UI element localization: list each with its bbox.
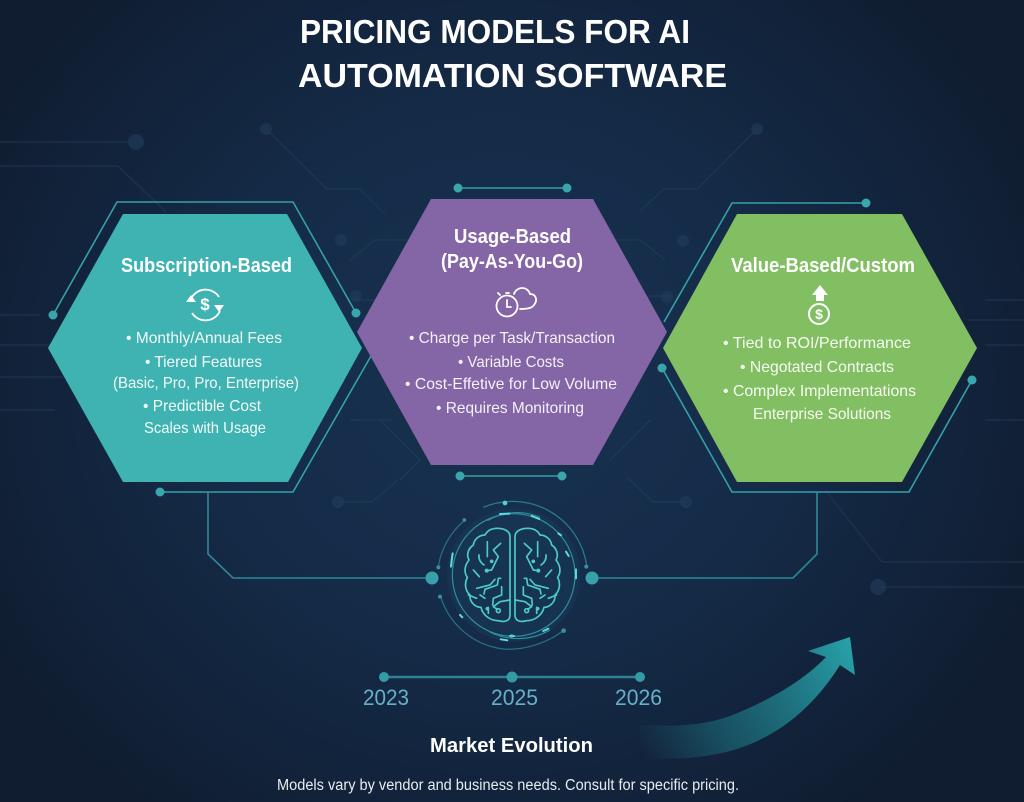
title: PRICING MODELS FOR AI [300,13,690,50]
text: usage features [405,330,617,417]
connector: subscription hexagon outline [48,202,371,496]
timeline: 2025 [491,685,538,710]
title [298,13,727,94]
heading: market evolution: Market Evolution [430,734,593,757]
icon: arrow over coin: $ [815,306,823,322]
connector: usage hexagon top bar [454,184,572,192]
connector: value hexagon outline [658,198,976,492]
footer note: Models vary by vendor and business needs. Consult for specific pricing. [277,777,739,794]
text: value features: • Tied to ROI/Performance [723,335,911,352]
circuit background pattern [0,129,1024,587]
text: usage features: • Cost-Effetive for Low Volume [405,376,617,393]
text: subscription features: • Predictible Cost [143,398,262,415]
timeline: 2026 [615,685,662,710]
connector: left hexagon to brain [208,492,438,584]
heading: usage-based [441,226,583,273]
heading: usage-based: Usage-Based [454,226,571,248]
text: value features: • Negotated Contracts [740,359,894,376]
panel: usage-based [357,199,667,465]
connector: usage hexagon bottom bar [456,472,566,480]
icon: recurring dollar [186,290,224,320]
text: usage features: • Charge per Task/Transaction [409,330,615,347]
text: subscription features: (Basic, Pro, Pro, Enterprise) [113,375,299,392]
icon: arrow over coin [809,285,829,324]
icon: circuit brain [436,501,588,649]
icon: stopwatch and cloud [496,288,536,316]
heading: subscription-based: Subscription-Based [121,255,292,277]
text: value features: Enterprise Solutions [753,406,891,423]
text: subscription features: • Tiered Features [145,354,262,371]
text: subscription features: • Monthly/Annual Fees [126,330,282,347]
icon: recurring dollar: $ [200,295,210,314]
arrow: market growth [640,637,855,759]
timeline [363,672,662,710]
timeline: 2023 [363,685,409,710]
panel: value-based/custom [663,214,977,482]
title: AUTOMATION SOFTWARE [298,57,727,94]
text: subscription features: Scales with Usage [144,420,266,437]
panel: subscription-based [48,214,362,482]
connector: right hexagon to brain [586,492,817,584]
text: value features [723,335,916,423]
text: subscription features [113,330,299,437]
text: usage features: • Requires Monitoring [436,400,584,417]
heading: value-based/custom: Value-Based/Custom [731,255,915,277]
heading: usage-based: (Pay-As-You-Go) [441,251,583,273]
text: value features: • Complex Implementations [723,383,916,400]
text: usage features: • Variable Costs [458,354,564,371]
